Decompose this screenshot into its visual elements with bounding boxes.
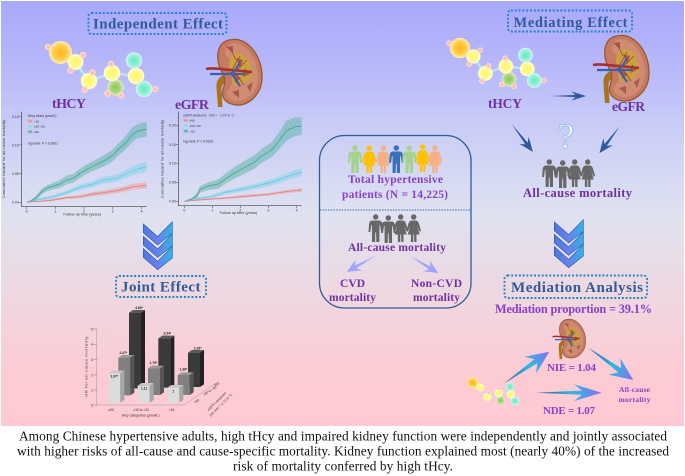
chart: cumulative hazard by eGFR strata (160, 112, 302, 215)
chart: cumulative hazard by eGFR strata: <60 (190, 129, 195, 133)
text: non-CVD mortality: mortality (413, 292, 460, 304)
icon: tHCY molecule right (446, 38, 547, 89)
chart: cumulative hazard by eGFR strata: Cumulative hazard for all-cause mortality (160, 120, 164, 198)
chart: cumulative hazard by tHcy strata: ≥20 (34, 130, 39, 134)
heading: Mediation Analysis: Mediation Analysis (511, 280, 643, 296)
chart: 3D bars of joint effect: 4.80* (135, 306, 144, 310)
chart: 3D bars of joint effect: 1.36* (179, 367, 188, 371)
arrow: kidney to mortality (582, 340, 639, 388)
chart: cumulative hazard by eGFR strata: 0 (183, 208, 185, 212)
chart: 3D bars of joint effect: 4 (91, 343, 93, 347)
chart: cumulative hazard by eGFR strata: 0.00 (169, 200, 176, 204)
chart: 3D bars of joint effect: ≥60 to <90 (202, 385, 217, 397)
heading: Mediation Analysis (504, 276, 647, 298)
text: NIE value: NIE = 1.04 (547, 362, 596, 374)
text: all-cause mortality: All-cause mortality (348, 242, 446, 254)
chart: cumulative hazard by eGFR strata: 0.10 (169, 162, 176, 166)
chart: cumulative hazard by tHcy strata: 0.00 (12, 201, 19, 205)
chart: 3D bars of joint effect: 1.97* (110, 374, 119, 378)
chart: cumulative hazard by tHcy strata: Follow up time (years) (63, 213, 102, 217)
chart: 3D bars of joint effect: 5 (91, 327, 93, 331)
chart: 3D bars of joint effect: <60 (193, 398, 200, 405)
conclusion text: risk of mortality conferred by high tHcy. (233, 458, 453, 474)
text: CVD mortality (329, 278, 376, 304)
chart: cumulative hazard by eGFR strata: 0.05 (169, 181, 176, 185)
chart: 3D bars of joint effect: tHcy categories (μmol/L) (122, 413, 160, 417)
label: all-cause mortality right: All-cause mortality (523, 186, 633, 200)
chart: 3D bars of joint effect: 2.47* (119, 351, 128, 355)
arrow: tHCY to eGFR (551, 91, 586, 101)
chart: cumulative hazard by eGFR strata: 2 (239, 208, 241, 212)
grey people icons (368, 214, 421, 243)
chart: cumulative hazard by eGFR strata: ≥90 (190, 119, 195, 123)
label: tHCY right: tHCY (488, 96, 522, 111)
chart: cumulative hazard by tHcy strata: 0.15 (12, 115, 19, 119)
text: non-CVD mortality (411, 278, 462, 304)
text: mediation proportion: Mediation proportion = 39.1% (495, 302, 652, 316)
chart: cumulative hazard by eGFR strata: Follow up time (years) (220, 211, 258, 215)
chart: 3D bars of joint effect: 2.28* (194, 346, 202, 350)
chart: 3D bars of joint effect: ≥20 (108, 408, 114, 412)
text: all-cause mortality small: mortality (618, 395, 651, 404)
chart: 3D bars of joint effect: HR for all-cause mortality (84, 337, 89, 397)
heading: Joint Effect: Joint Effect (121, 280, 200, 296)
arrow: to non-CVD mortality (407, 251, 442, 278)
chart: cumulative hazard by tHcy strata: 0.05 (12, 172, 19, 176)
icon: tHCY molecule (45, 41, 158, 99)
text: CVD mortality: CVD (340, 278, 365, 290)
chart: cumulative hazard by eGFR strata: log-rank: P < 0.0001 (183, 140, 213, 144)
icon: kidney right (593, 35, 649, 103)
chart: 3D bars of joint effect: 1.11 (141, 387, 147, 391)
chart: 3D bars of joint effect: ≥90 (213, 381, 220, 388)
label: eGFR right: eGFR (612, 99, 645, 114)
chart: cumulative hazard by tHcy strata: 4 (141, 209, 143, 213)
chart: 3D bars of joint effect: 2 (91, 373, 93, 377)
text: total hypertensive patients (342, 174, 448, 201)
chart: 3D bars of joint effect: 1 (172, 389, 174, 393)
chart: cumulative hazard by tHcy strata: 1 (54, 209, 56, 213)
text: non-CVD mortality: Non-CVD (411, 278, 462, 290)
colored people icons (348, 144, 442, 173)
chart: cumulative hazard by eGFR strata: 0.15 (169, 143, 176, 147)
text: all-cause mortality small (618, 385, 651, 404)
heading: Joint Effect (116, 276, 206, 297)
chart: 3D bars of joint effect: 0 (91, 403, 93, 407)
icon: kidney small (553, 319, 586, 359)
dark bars: eGFR below 60 (129, 310, 204, 388)
mid bars: eGFR 60 to 90 (118, 355, 194, 395)
text: NDE value: NDE = 1.07 (543, 405, 596, 417)
heading: Mediating Effect: Mediating Effect (514, 15, 628, 31)
chart: cumulative hazard by eGFR strata: 1 (211, 208, 213, 212)
chart: 3D bars of joint effect: 1 (91, 388, 93, 392)
arrow: molecule to kidney (499, 343, 555, 392)
chart: cumulative hazard by tHcy strata: 2 (83, 209, 85, 213)
icon: kidney (206, 39, 262, 107)
text: all-cause mortality small: All-cause (619, 385, 651, 394)
chart: 3D bars of joint effect: 3 (91, 358, 93, 362)
chart: cumulative hazard by tHcy strata: ≥15-<20 (34, 125, 45, 129)
light bars: eGFR above 90 (108, 371, 183, 403)
chart: cumulative hazard by tHcy strata: <15 (34, 119, 39, 123)
chart: cumulative hazard by tHcy strata (2, 112, 147, 217)
icon: grey people right (542, 159, 595, 188)
arrow: eGFR to mortality (595, 122, 625, 157)
chart: cumulative hazard by tHcy strata: Cumulative hazard for all-cause mortality (2, 120, 6, 198)
label: tHCY: tHCY (52, 97, 86, 112)
chart: 3D bars of joint effect: ≥15 to <20 (133, 408, 149, 412)
arrow: molecule to mortality (536, 384, 602, 401)
icon: question mark: ? (558, 116, 574, 156)
chart: cumulative hazard by tHcy strata: Hhcy strata (μmol/L) (28, 114, 56, 118)
chart: 3D bars of joint effect: 3.34* (163, 332, 172, 336)
chart: cumulative hazard by tHcy strata: 0.10 (12, 143, 19, 147)
chart: cumulative hazard by eGFR strata: 0.20 (169, 124, 176, 128)
arrow: chevrons to joint effect (143, 222, 172, 270)
chart: cumulative hazard by eGFR strata: eGFR strata (mL · min⁻¹ · 1.73 m⁻²) (183, 113, 234, 117)
conclusion text: Among Chinese hypertensive adults, high tHcy and impaired kidney function were independently and jointly associated (19, 428, 667, 444)
conclusion text (17, 428, 669, 474)
arrow: to CVD mortality (344, 250, 379, 277)
chart: 3D bars of joint effect: eGFR categories (207, 391, 227, 412)
conclusion text: with higher risks of all-cause and cause-specific mortality. Kidney function explained most (nearly 40%) of the increased (17, 444, 669, 458)
chart: cumulative hazard by tHcy strata: log-rank: P < 0.0001 (28, 142, 58, 146)
panel: study population (320, 136, 471, 308)
text: total hypertensive patients: patients (N = 14,225) (342, 189, 448, 201)
text: total hypertensive patients: Total hypertensive (348, 174, 443, 186)
chart: 3D bars of joint effect: <15 (169, 408, 174, 412)
arrow: tHCY to mortality (507, 120, 538, 155)
chart: cumulative hazard by tHcy strata: 0 (26, 209, 28, 213)
chart: cumulative hazard by eGFR strata: 4 (296, 208, 298, 212)
chart: 3D bars of joint effect (84, 306, 233, 417)
chart: cumulative hazard by eGFR strata: ≥60-<90 (190, 124, 201, 128)
text: CVD mortality: mortality (329, 292, 376, 304)
chart: 3D bars of joint effect: (mL·min⁻¹·1.73 m⁻²) (209, 393, 233, 417)
icon: molecule small (465, 377, 522, 406)
chart: cumulative hazard by eGFR strata: 3 (267, 208, 269, 212)
label: eGFR: eGFR (175, 98, 210, 113)
chart: cumulative hazard by tHcy strata: 3 (112, 209, 114, 213)
chart: 3D bars of joint effect: 1.79* (149, 361, 158, 365)
arrow: chevrons to mediation analysis (554, 220, 583, 268)
heading: Independent Effect: Independent Effect (93, 16, 223, 32)
